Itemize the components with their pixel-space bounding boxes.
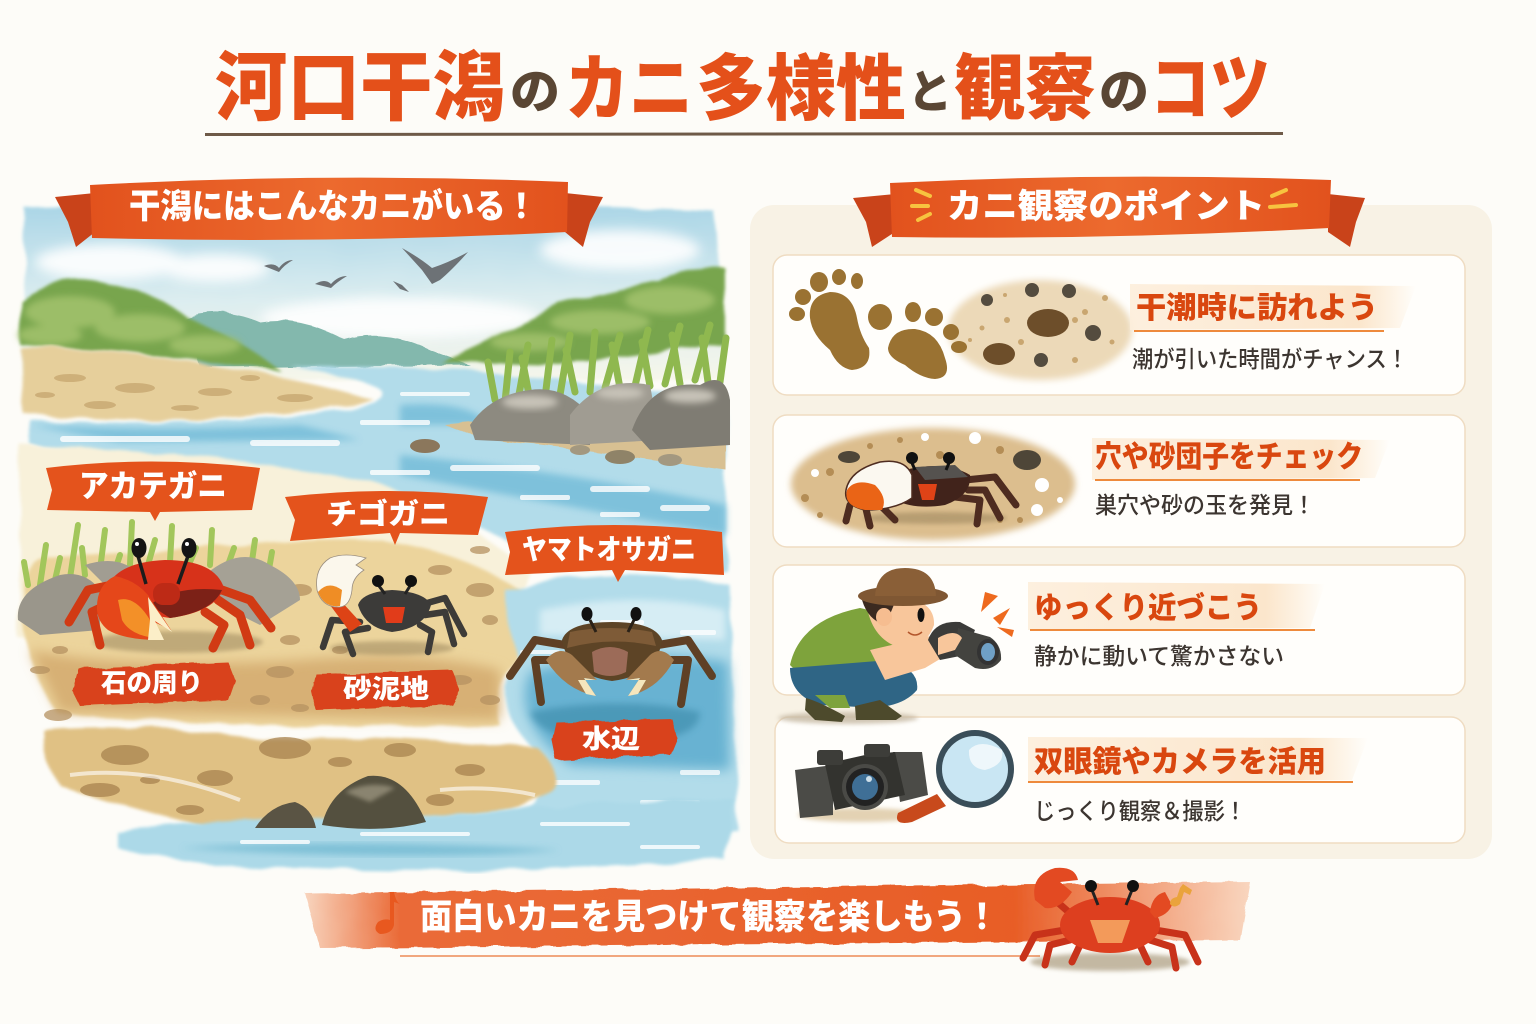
crab: burrow crab with white claw bbox=[846, 452, 1016, 526]
crab shadow in water bbox=[530, 704, 700, 742]
title: の bbox=[1099, 66, 1149, 119]
crab: Akategani bbox=[69, 538, 271, 653]
heading: ゆっくり近づこう bbox=[1034, 592, 1262, 625]
icon: sand patch bbox=[791, 428, 1075, 540]
foreground deep water bbox=[180, 843, 560, 856]
crab: Yamato-osagani bbox=[510, 607, 712, 704]
heading: 干潮時に訪れよう bbox=[1136, 292, 1378, 325]
river deep tones bbox=[30, 404, 726, 535]
birds bbox=[264, 248, 468, 292]
foreground ripples bbox=[240, 822, 700, 849]
right forest bbox=[440, 265, 725, 365]
central sand flat bbox=[24, 539, 528, 726]
crab: Chigogani bbox=[317, 555, 464, 655]
panel: tidal flat scene bbox=[18, 203, 738, 870]
clouds bbox=[35, 230, 700, 338]
banner: crabs in the tidal flat: 干潟にはこんなカニがいる！ bbox=[129, 187, 537, 226]
banner: crabs in the tidal flat bbox=[55, 178, 603, 247]
title: 観察 bbox=[954, 50, 1096, 130]
right shallows bbox=[505, 576, 738, 830]
label: Akategani bbox=[46, 462, 260, 521]
foreground rocks bbox=[255, 776, 426, 829]
icon: photographer bbox=[778, 568, 1001, 724]
banner: observation points: カニ観察のポイント bbox=[947, 188, 1265, 226]
lower sand pebbles bbox=[80, 737, 485, 815]
title bbox=[215, 46, 1270, 131]
shallows ripples bbox=[520, 620, 720, 805]
lower sand foam bbox=[70, 773, 535, 800]
title: カニ bbox=[565, 50, 693, 130]
label: Sandy mud bbox=[312, 670, 460, 710]
river stones bbox=[410, 439, 682, 466]
label: Yamato-osagani: ヤマトオサガニ bbox=[522, 534, 696, 565]
central sand pebbles bbox=[30, 546, 500, 721]
shallows deep band bbox=[525, 655, 730, 770]
heading highlight bbox=[1130, 284, 1416, 330]
heading: 穴や砂団子をチェック bbox=[1095, 441, 1363, 474]
description: 巣穴や砂の玉を発見！ bbox=[1095, 492, 1315, 518]
icon: camera bbox=[795, 744, 928, 822]
label: Akategani: アカテガニ bbox=[79, 469, 227, 504]
river water bbox=[30, 366, 726, 570]
label: Yamato-osagani bbox=[505, 525, 724, 582]
title: 多様性 bbox=[696, 50, 906, 130]
cream gap behind labels bbox=[20, 445, 530, 640]
panel: observation points bbox=[750, 205, 1492, 859]
rocks behind Akategani bbox=[18, 557, 300, 635]
icon: footprints bbox=[789, 269, 967, 379]
right sandbar bbox=[445, 416, 726, 470]
card: burrows and sand balls bbox=[773, 415, 1465, 547]
riverside grass bbox=[488, 325, 726, 402]
left sandbank bbox=[20, 348, 376, 420]
riverside rocks bbox=[470, 380, 730, 450]
crab: mascot bbox=[1023, 868, 1198, 971]
heading: 双眼鏡やカメラを活用 bbox=[1034, 746, 1326, 779]
description: 静かに動いて驚かさない bbox=[1034, 643, 1284, 669]
title: 河口干潟 bbox=[215, 46, 505, 131]
sky bbox=[20, 203, 725, 380]
heading highlight bbox=[1092, 438, 1390, 480]
label: Chigogani bbox=[285, 491, 488, 545]
title underline bbox=[205, 132, 1283, 136]
message: 面白いカニを見つけて観察を楽しもう！ bbox=[420, 898, 998, 937]
left forest bbox=[18, 280, 282, 372]
description: 潮が引いた時間がチャンス！ bbox=[1132, 346, 1408, 372]
banner: bottom message bbox=[305, 882, 1250, 957]
heading highlight bbox=[1028, 582, 1325, 630]
foreground water bbox=[115, 800, 735, 870]
card: low tide bbox=[773, 255, 1465, 395]
card: binoculars and camera bbox=[775, 717, 1465, 843]
shallows pale band bbox=[540, 600, 725, 640]
grass behind Akategani bbox=[24, 522, 272, 585]
title: と bbox=[908, 66, 952, 118]
description: じっくり観察＆撮影！ bbox=[1034, 798, 1246, 824]
central sand shading bbox=[30, 650, 500, 720]
icon: music note bbox=[375, 892, 400, 934]
label: Rock surroundings: 石の周り bbox=[101, 668, 203, 698]
heading highlight bbox=[1028, 737, 1368, 783]
river ripples bbox=[60, 392, 710, 541]
left sandbank pebbles bbox=[35, 374, 313, 411]
icon: music note right bbox=[1170, 884, 1192, 906]
icon: sand burrows bbox=[948, 280, 1132, 380]
label: Sandy mud: 砂泥地 bbox=[343, 674, 429, 704]
icon: camera flash bbox=[981, 592, 1014, 637]
lower sand flat bbox=[43, 727, 555, 835]
title: の bbox=[510, 66, 560, 119]
card: approach slowly bbox=[773, 565, 1465, 724]
label: Waterside: 水辺 bbox=[582, 724, 640, 754]
banner: observation points bbox=[853, 177, 1365, 247]
icon: magnifying glass bbox=[897, 733, 1011, 823]
label: Chigogani: チゴガニ bbox=[326, 497, 450, 531]
mountains bbox=[185, 312, 470, 368]
label: Waterside bbox=[552, 719, 677, 760]
label: Rock surroundings bbox=[72, 662, 235, 706]
title: コツ bbox=[1150, 50, 1270, 130]
